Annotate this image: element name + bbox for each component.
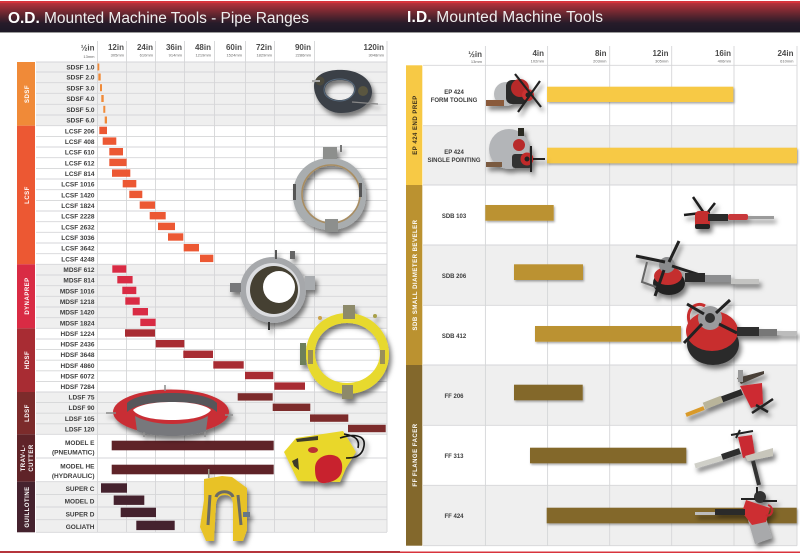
- bars: LDSF: [238, 393, 386, 432]
- icon: Dynaprep ring: [230, 250, 315, 330]
- row labels: EP 424: [444, 90, 464, 96]
- row labels: LCSF 3642: [61, 246, 95, 253]
- column headers: 610mm: [780, 58, 794, 64]
- row labels: LCSF 3036: [61, 235, 95, 242]
- row labels: MDSF 612: [63, 267, 95, 274]
- row labels: SDSF 3.0: [66, 85, 95, 92]
- column headers: 90in: [295, 43, 311, 52]
- panel: I.D. mounted tools chart: [406, 46, 797, 546]
- row labels: LCSF 1420: [61, 192, 95, 199]
- row labels: [52, 64, 95, 531]
- column headers: 4in: [532, 49, 544, 58]
- column headers: 102mm: [531, 58, 545, 64]
- bars: FF: [514, 385, 797, 523]
- row labels: GOLIATH: [66, 524, 95, 531]
- row labels: SUPER D: [66, 511, 95, 518]
- row labels: LCSF 610: [65, 150, 95, 157]
- column headers: [81, 43, 385, 59]
- column headers: 1829mm: [256, 52, 273, 58]
- row backgrounds: [423, 126, 797, 546]
- column headers: 1524mm: [226, 52, 243, 58]
- row labels: SDSF 1.0: [66, 64, 95, 71]
- category: LCSF: LCSF: [25, 186, 31, 204]
- category: HDSF: HDSF: [25, 351, 31, 369]
- column headers: 72in: [256, 43, 272, 52]
- column headers: 36in: [166, 43, 182, 52]
- column headers: 13mm: [471, 59, 483, 64]
- column headers: 406mm: [718, 58, 732, 64]
- row labels: HDSF 7284: [61, 384, 95, 391]
- category: Trav-L-Cutter: TRAV-L-: [21, 445, 27, 471]
- row labels: LCSF 814: [65, 171, 95, 178]
- icon: FF 206: [686, 370, 773, 415]
- category: Guillotine: [17, 482, 35, 532]
- row backgrounds: [36, 62, 387, 532]
- page header band: [0, 1, 800, 33]
- column headers: 24in: [777, 49, 794, 58]
- category: EP 424 End Prep: [406, 65, 422, 185]
- row labels: MDSF 1824: [60, 320, 95, 327]
- row labels: LDSF 75: [68, 395, 95, 402]
- row labels: EP 424: [444, 150, 464, 156]
- row labels: FF 424: [444, 514, 464, 520]
- grid lines: [423, 46, 797, 546]
- icon: LDSF large red ring: [106, 385, 233, 437]
- grid lines: [36, 41, 387, 532]
- row labels: MDSF 1016: [60, 288, 95, 295]
- icon: LCSF split frame ring: [293, 145, 366, 232]
- category: Trav-L-Cutter: [17, 434, 35, 482]
- bars: EP 424: [547, 87, 797, 163]
- row labels: LCSF 1824: [61, 203, 95, 210]
- row labels: SDSF 4.0: [66, 96, 95, 103]
- row labels: FF 206: [444, 394, 464, 400]
- row labels: [427, 90, 481, 520]
- row labels: SDB 412: [442, 334, 467, 340]
- row labels: HDSF 2436: [61, 342, 95, 349]
- column headers: ½in: [81, 44, 95, 52]
- bars: SDB: [485, 205, 681, 342]
- category: HDSF: [17, 328, 35, 392]
- icon: FF 424: [695, 487, 777, 544]
- row labels: LCSF 2228: [61, 214, 95, 221]
- category: SDB Small Diameter Beveler: SDB SMALL DIAMETER BEVELER: [413, 219, 419, 330]
- row labels: SDSF 6.0: [66, 118, 95, 125]
- column headers: 8in: [595, 49, 607, 58]
- bars: HDSF: [125, 329, 305, 390]
- category: FF Flange Facer: [406, 365, 422, 546]
- row labels: (PNEUMATIC): [52, 450, 94, 456]
- category: SDB Small Diameter Beveler: [406, 185, 422, 365]
- icon: HDSF yellow ring: [300, 305, 389, 399]
- row labels: LDSF 105: [65, 416, 95, 423]
- row labels: HDSF 1224: [61, 331, 95, 338]
- row labels: SDB 206: [442, 274, 467, 280]
- panel: O.D. pipe range chart: [17, 41, 389, 541]
- icon: EP 424 form tooling: [486, 74, 541, 112]
- category: Dynaprep: [17, 264, 35, 328]
- heading: I.D. tools: I.D. Mounted Machine Tools: [407, 9, 603, 26]
- column headers: 2286mm: [295, 52, 312, 58]
- column headers: 3048mm: [368, 52, 385, 58]
- bars: MDSF: [112, 265, 156, 326]
- row labels: LDSF 90: [68, 405, 95, 412]
- row labels: MODEL HE: [60, 464, 95, 470]
- icon: SDB 206: [636, 241, 759, 296]
- bars: Trav-L-Cutter: [112, 441, 274, 474]
- row labels: LCSF 612: [65, 160, 95, 167]
- row labels: SDSF 5.0: [66, 107, 95, 114]
- row labels: MODEL D: [65, 499, 95, 506]
- heading: O.D. tools: O.D. Mounted Machine Tools - Pipe Ranges: [8, 10, 309, 27]
- column headers: 60in: [226, 43, 242, 52]
- column headers: 305mm: [655, 58, 669, 64]
- row labels: MDSF 1218: [60, 299, 95, 306]
- row labels: LCSF 2632: [61, 224, 95, 231]
- row labels: LCSF 1016: [61, 182, 95, 189]
- column headers: 16in: [715, 49, 731, 58]
- row labels: HDSF 4860: [61, 363, 95, 370]
- bottom rule: [0, 551, 800, 553]
- column headers: 305mm: [111, 52, 125, 58]
- column headers: 48in: [195, 43, 211, 52]
- row labels: HDSF 6072: [61, 373, 95, 380]
- bars: Guillotine: [101, 483, 175, 530]
- icon: SDSF clamshell ring: [312, 70, 378, 113]
- category: Trav-L-Cutter: CUTTER: [29, 444, 35, 472]
- category: Guillotine: GUILLOTINE: [25, 486, 31, 528]
- column headers: 24in: [137, 43, 153, 52]
- row labels: LCSF 206: [65, 128, 95, 135]
- row labels: LCSF 408: [65, 139, 95, 146]
- icon: EP 424 single pointing: [486, 128, 545, 172]
- row labels: SUPER C: [66, 486, 95, 493]
- category: SDSF: [17, 62, 35, 126]
- category: Dynaprep: DYNAPREP: [25, 277, 31, 315]
- category: FF Flange Facer: FF FLANGE FACER: [413, 423, 419, 487]
- category: SDSF: SDSF: [25, 85, 31, 103]
- row labels: FORM TOOLING: [431, 98, 478, 104]
- icon: SDB 412: [684, 300, 797, 365]
- column headers: 120in: [364, 43, 384, 52]
- row labels: (HYDRAULIC): [52, 473, 94, 480]
- column headers: ½in: [468, 50, 482, 59]
- column headers: 610mm: [140, 52, 154, 58]
- row labels: MDSF 814: [63, 278, 95, 285]
- icon: Trav-L-Cutter yellow unit: [284, 431, 364, 483]
- row labels: LCSF 4248: [61, 256, 95, 263]
- row labels: MDSF 1420: [60, 310, 95, 317]
- category: LDSF: LDSF: [25, 404, 31, 422]
- row labels: SDSF 2.0: [66, 75, 95, 82]
- column headers: [468, 49, 794, 64]
- column headers: 1219mm: [195, 52, 212, 58]
- row labels: FF 313: [444, 454, 464, 460]
- column headers: 203mm: [593, 58, 607, 64]
- icon: FF 313: [695, 430, 773, 485]
- row labels: SDB 103: [442, 214, 467, 220]
- icon: Guillotine yellow frame: [200, 469, 250, 541]
- bars: SDSF: [98, 64, 107, 124]
- row labels: SINGLE POINTING: [427, 158, 481, 164]
- column headers: 12in: [652, 49, 669, 58]
- category: LDSF: [17, 392, 35, 434]
- bars: LCSF: [99, 127, 213, 262]
- column headers: 914mm: [169, 52, 183, 58]
- icon: SDB 103: [684, 197, 774, 229]
- row labels: MODEL E: [65, 440, 95, 447]
- column headers: 12in: [108, 43, 124, 52]
- category: EP 424 End Prep: EP 424 END PREP: [413, 95, 419, 155]
- column headers: 13mm: [83, 54, 95, 59]
- category: LCSF: [17, 126, 35, 264]
- row labels: HDSF 3648: [61, 352, 95, 359]
- row labels: LDSF 120: [65, 426, 95, 433]
